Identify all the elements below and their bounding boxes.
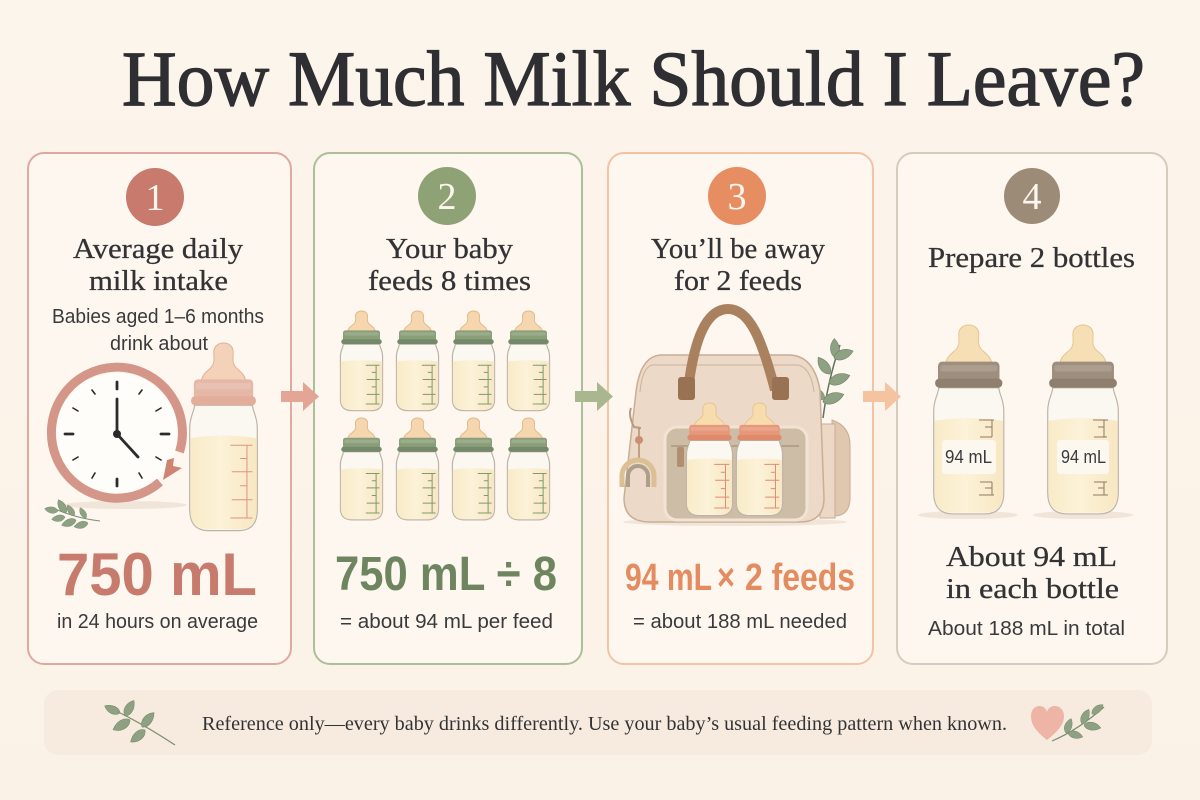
amount: 94 mL x 2 feeds: 94 mL — [625, 557, 712, 599]
icon: heart — [1031, 706, 1064, 740]
step number 3: 3 — [728, 176, 746, 218]
icon: clock with circular arrow — [51, 367, 187, 509]
icon: leaf sprig — [44, 498, 100, 530]
text: in 24 hours: in 24 hours on average — [57, 611, 258, 633]
step number 4 — [1004, 168, 1060, 224]
heading: you'll be away: for 2 feeds — [674, 265, 802, 297]
icon: eight green bottles — [340, 311, 550, 520]
amount: 750 mL divided by 8: 750 mL ÷ 8 — [335, 548, 557, 601]
amount: 94 mL x 2 feeds: × — [717, 557, 735, 599]
heading: average daily milk intake: Average daily — [73, 233, 244, 265]
heading: your baby feeds 8 times — [368, 233, 531, 297]
heading: your baby feeds 8 times: feeds 8 times — [368, 265, 531, 297]
icon: right sprig — [1052, 702, 1105, 741]
icon: bottle with 94 mL label, right — [1033, 325, 1133, 519]
heading: average daily milk intake: milk intake — [89, 265, 228, 297]
step number 2 — [418, 167, 476, 225]
text: babies aged: Babies aged 1–6 months — [52, 306, 264, 328]
icon: bottle with 94 mL label, right: 94 mL — [1061, 447, 1106, 467]
icon: left sprig — [103, 698, 175, 746]
note text: Reference only—every baby drinks differently. Use your baby’s usual feeding pattern when known. — [202, 713, 1007, 735]
bag side charm: rainbow — [622, 408, 654, 487]
side pocket — [832, 420, 850, 516]
panel: step 4 prepare — [897, 153, 1167, 664]
step number 3 — [708, 167, 766, 225]
text: about 94 mL in each bottle: About 94 mL — [946, 541, 1117, 573]
text: babies aged — [52, 306, 264, 355]
text: about 188 mL needed: = about 188 mL needed — [633, 611, 847, 633]
arrow: step 2 to 3 — [575, 382, 613, 411]
heading: your baby feeds 8 times: Your baby — [386, 233, 514, 265]
text: about 94 mL in each bottle — [946, 541, 1119, 605]
amount: 94 mL x 2 feeds — [625, 557, 855, 599]
icon: pink bottle — [190, 343, 257, 531]
heading: you'll be away — [651, 233, 825, 297]
sprig in bag pocket — [823, 345, 840, 418]
icon: diaper bag with two bottles — [622, 309, 855, 526]
panel: step 2 feeds — [314, 153, 582, 664]
panel: step 3 away — [608, 153, 873, 664]
heading: you'll be away: You’ll be away — [651, 233, 825, 265]
text: babies aged: drink about — [110, 333, 208, 355]
icon: bottle with 94 mL label, left: 94 mL — [945, 447, 992, 467]
footer note banner — [44, 690, 1152, 755]
handle — [688, 309, 775, 390]
panel: step 1 average daily intake — [28, 153, 291, 664]
text: about 94 mL in each bottle: in each bottle — [946, 573, 1119, 605]
step number 1: 1 — [146, 177, 164, 219]
clear front pocket — [665, 427, 807, 520]
step number 2: 2 — [438, 176, 456, 218]
title: How Much Milk Should I Leave? — [122, 35, 1145, 122]
arrow: step 1 to 2 — [281, 382, 319, 411]
amount: 94 mL x 2 feeds: 2 feeds — [745, 557, 855, 599]
arrow: step 3 to 4 — [863, 382, 901, 411]
step number 4: 4 — [1022, 176, 1042, 218]
heading: prepare 2 bottles: Prepare 2 bottles — [928, 242, 1135, 274]
bag body — [624, 355, 824, 522]
heading: average daily milk intake — [73, 233, 244, 297]
icon: bottle with 94 mL label, left — [918, 325, 1018, 519]
two orange bottles — [686, 403, 783, 516]
step number 1 — [126, 168, 184, 226]
amount: 750 mL: 750 mL — [57, 541, 257, 608]
text: about 94 mL per feed: = about 94 mL per feed — [340, 611, 553, 633]
text: about 188 mL in total: About 188 mL in total — [928, 618, 1125, 640]
